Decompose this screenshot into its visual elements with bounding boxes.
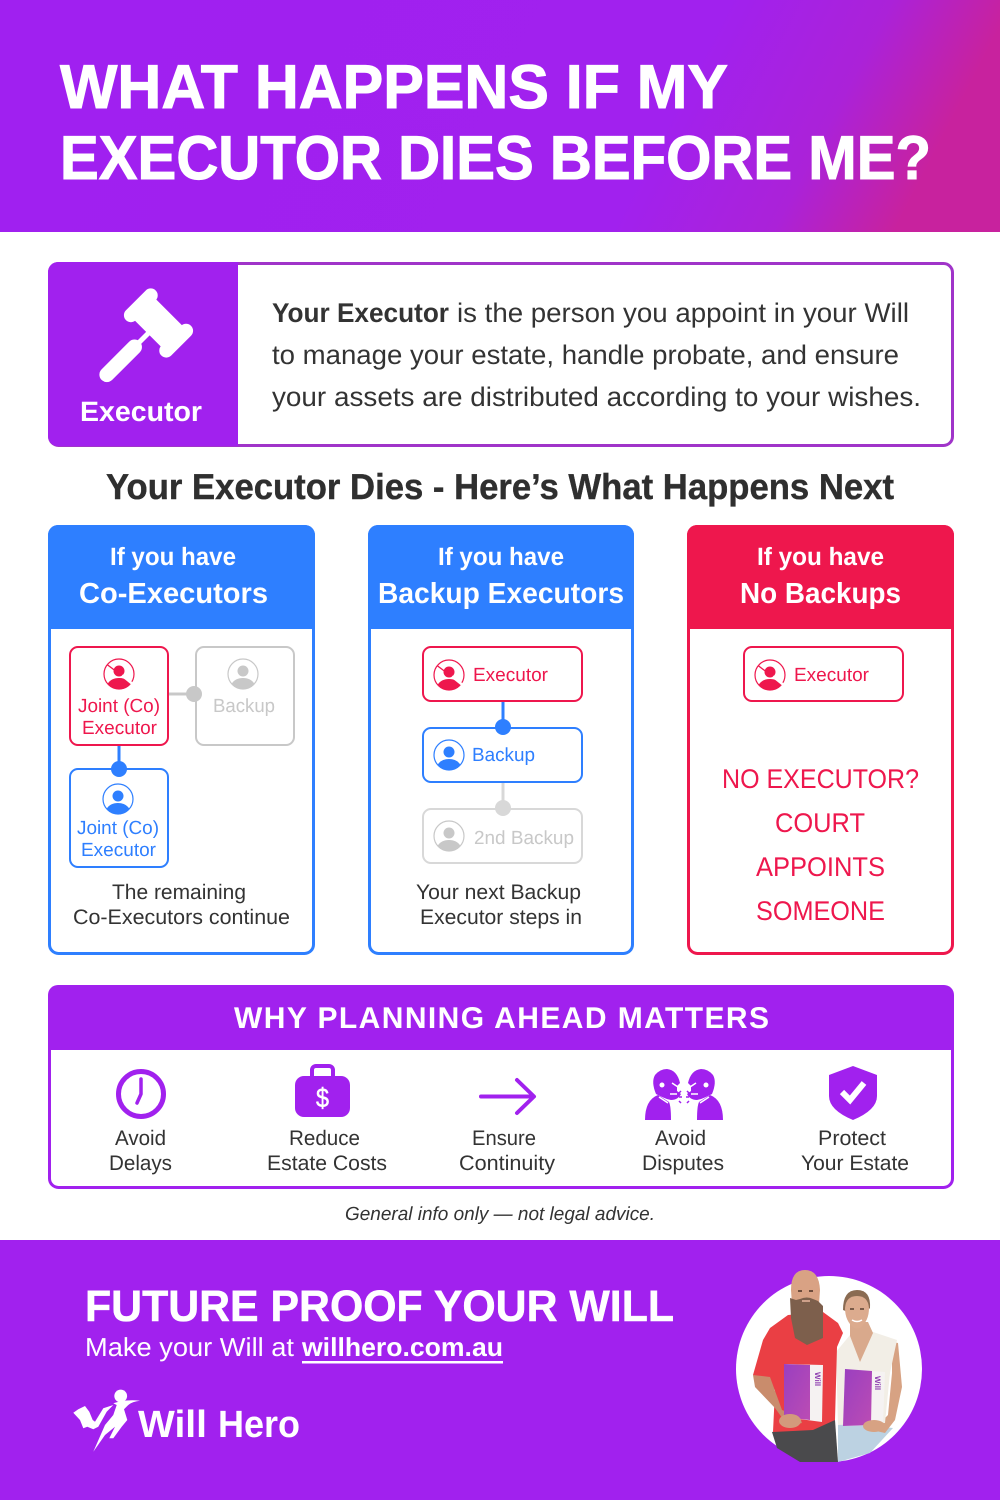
court appoints message: NO EXECUTOR? [722,764,919,794]
item: avoid disputes [642,1069,724,1175]
item: avoid delays [109,1072,172,1175]
woman's neck [850,1322,873,1362]
item: avoid disputes: Disputes [642,1152,724,1175]
item: ensure continuity: Continuity [459,1152,556,1175]
woman's jeans [838,1423,893,1462]
card caption: Co-Executors continue [73,906,290,929]
man's shorts [772,1420,838,1462]
card caption: Your next Backup [416,881,581,904]
panel: executor definition [48,262,952,446]
item: avoid disputes: Avoid [655,1127,706,1150]
footer headline: FUTURE PROOF YOUR WILL [85,1282,674,1331]
box: backup [423,728,582,782]
woman's booklet [843,1369,885,1426]
item: ensure continuity: Ensure [472,1127,536,1150]
man's arm [753,1375,802,1426]
court appoints message: APPOINTS [756,852,885,882]
card header: No Backups [740,578,901,610]
header banner [0,0,1000,232]
box: inactive backup: Backup [213,696,275,717]
box: deceased joint executor: Executor [82,718,158,739]
panel: backup executors [368,525,634,954]
logo: Will Hero: Hero [218,1404,300,1446]
box: second backup [423,809,582,863]
card header: Backup Executors [378,578,624,610]
box: deceased executor: Executor [794,665,870,686]
title [60,53,931,193]
box: deceased joint executor: Joint (Co) [78,696,160,717]
card caption [73,881,290,929]
woman's hair [843,1290,870,1312]
woman's top [836,1332,897,1425]
hands [779,1414,801,1428]
photo: couple holding Will packs: Will [813,1372,822,1386]
card header: If you have [757,543,884,571]
photo: couple holding Will packs: Will [873,1376,882,1390]
card header [368,525,634,629]
item: reduce estate costs [267,1066,387,1175]
court appoints message: COURT [775,808,865,838]
definition text: to manage your estate, handle probate, and ensure [272,340,899,370]
panel: why planning ahead matters [48,985,954,1188]
box: deceased executor: Executor [473,665,549,686]
box: remaining joint executor: Executor [81,840,157,861]
card header [48,525,315,629]
card header: Co-Executors [79,578,268,610]
item: reduce estate costs: Estate Costs [267,1152,387,1175]
card caption: The remaining [112,881,246,904]
box: second backup: 2nd Backup [474,828,574,849]
man's beard [790,1298,823,1345]
item: reduce estate costs: Reduce [289,1127,360,1150]
court appoints message: SOMEONE [756,896,885,926]
item: avoid delays: Avoid [115,1127,166,1150]
footer banner [0,1240,1000,1500]
definition text: is the person you appoint in your Will [457,298,909,328]
man's booklet [784,1364,823,1422]
card header: If you have [110,543,236,571]
title: WHAT HAPPENS IF MY [60,53,728,122]
box: inactive backup [196,647,294,745]
title: EXECUTOR DIES BEFORE ME? [60,124,931,193]
panel heading [48,985,954,1050]
item: avoid delays: Delays [109,1152,172,1175]
box: remaining joint executor [70,769,168,867]
call to action: Make your Will at [85,1332,295,1362]
definition text: your assets are distributed according to your wishes. [272,382,921,412]
man's face details [798,1290,813,1292]
definition text [272,298,921,412]
box: deceased joint executor [70,647,168,745]
disclaimer: General info only — not legal advice. [345,1204,655,1225]
logo: Will Hero [73,1390,300,1452]
card header [687,525,954,629]
man's head [791,1270,820,1304]
definition text: Your Executor [272,298,449,328]
icon: gavel [84,286,196,397]
item: protect your estate [801,1066,909,1175]
man's shirt [753,1312,843,1432]
box: remaining joint executor: Joint (Co) [77,818,159,839]
call to action [85,1332,503,1364]
photo: couple holding Will packs [736,1270,922,1462]
woman's arm [863,1342,902,1433]
card caption [416,881,582,929]
card header: If you have [438,543,564,571]
woman's face [845,1296,869,1324]
section heading: Your Executor Dies - Here’s What Happens Next [106,466,894,507]
panel heading: WHY PLANNING AHEAD MATTERS [234,1002,769,1035]
card caption: Executor steps in [420,906,582,929]
box: deceased executor [744,647,903,701]
item: protect your estate: Protect [818,1127,886,1150]
item: ensure continuity [459,1080,556,1175]
item: reduce estate costs: $ [316,1083,329,1113]
box: deceased executor [423,647,582,701]
item: protect your estate: Your Estate [801,1152,909,1175]
box: backup: Backup [472,745,535,766]
panel: no backups [687,525,954,954]
court appoints message [722,764,919,926]
panel: co-executors [48,525,315,954]
logo: Will Hero: Will [138,1404,207,1446]
call to action: willhero.com.au [301,1332,503,1362]
icon label: Executor [80,396,202,427]
